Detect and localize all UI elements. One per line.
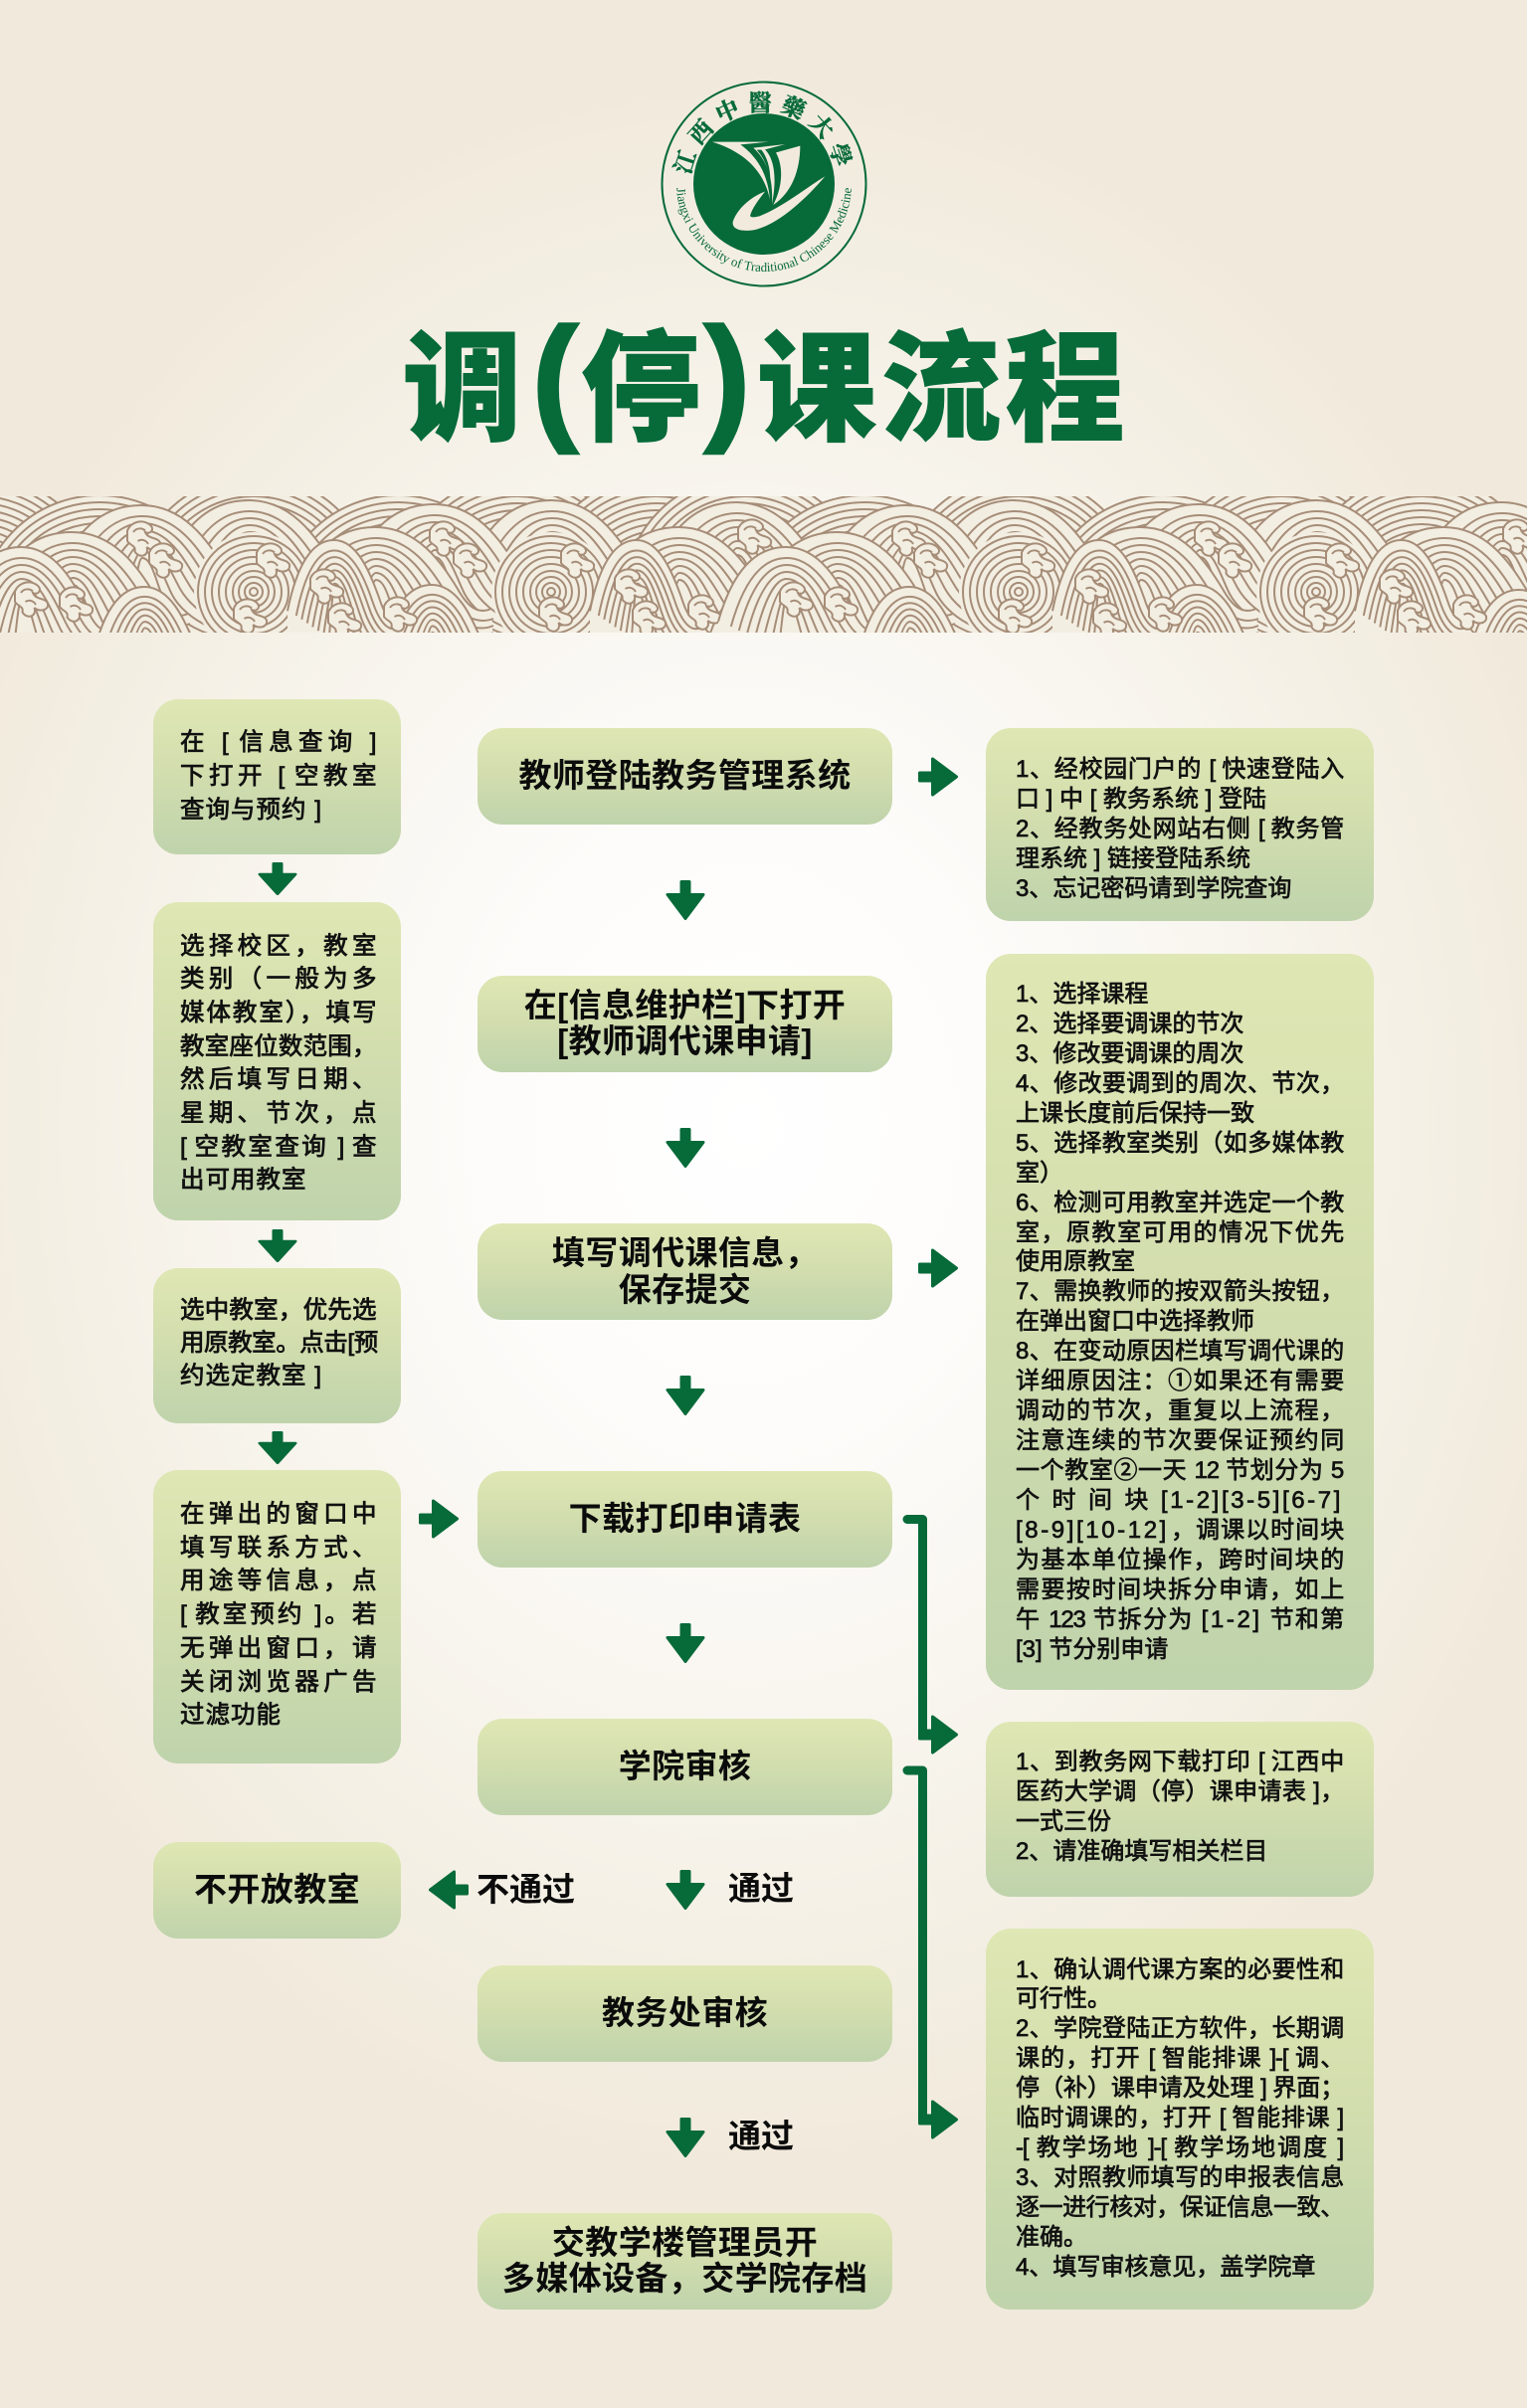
right box 4: college review notes: 2、学院登陆正方软件，长期调 [1016, 2015, 1343, 2042]
step 3: 填写调代课信息， [552, 1233, 818, 1271]
step 5 [477, 1719, 892, 1815]
right box 1: login notes [986, 728, 1374, 921]
label: passed 2: 通过 [728, 2118, 794, 2154]
arrow: step 1 to 2 [668, 881, 703, 919]
arrow: step 1 to right box 1 [919, 759, 957, 795]
left box 2: 选择校区，教室 [180, 933, 375, 959]
right box 2: application notes: 6、检测可用教室并选定一个教 [1016, 1190, 1343, 1216]
right box 2: application notes: [8-9][10-12]，调课以时间块 [1016, 1517, 1343, 1544]
title: ( [532, 298, 578, 455]
left box 4: [ 教室预约 ]。若 [180, 1601, 375, 1628]
right box 3: print form notes [986, 1722, 1374, 1897]
logo inner disc [693, 113, 835, 255]
label: passed 1: 通过 [728, 1870, 794, 1907]
right box 2: application notes: [3] 节分别申请 [1016, 1636, 1168, 1663]
right box 2: application notes: 5、选择教室类别（如多媒体教 [1016, 1130, 1343, 1157]
title: 流 [881, 292, 1001, 465]
right box 1: login notes: 口 ] 中 [ 教务系统 ] 登陆 [1016, 786, 1266, 813]
left box 4: 用途等信息，点 [180, 1568, 375, 1594]
step 7 [477, 2213, 892, 2310]
right box 2: application notes [986, 954, 1374, 1690]
step 4: 下载打印申请表 [569, 1500, 801, 1536]
left box 3: 用原教室。点击[预 [180, 1330, 375, 1357]
arrow: step 3 to right box 2 [919, 1250, 957, 1286]
arrow: not passed to left [430, 1872, 468, 1908]
left box 2: 类别（一般为多 [180, 966, 375, 993]
left box 5: classroom not opened [153, 1842, 401, 1939]
left box 3 [153, 1268, 401, 1423]
right box 4: college review notes: 1、确认调代课方案的必要性和 [1016, 1955, 1343, 1983]
connector: step 4 to right box 3 [907, 1520, 957, 1753]
arrow: left box 4 to step 4 [420, 1501, 458, 1537]
right box 3: print form notes: 一式三份 [1016, 1808, 1111, 1835]
arrow: left column down 2 [260, 1230, 295, 1261]
right box 2: application notes: 详细原因注：①如果还有需要 [1016, 1368, 1343, 1394]
title: ) [704, 298, 750, 455]
step 2: 在[信息维护栏]下打开 [524, 987, 846, 1022]
step 3: 保存提交 [619, 1271, 751, 1307]
right box 2: application notes: 需要按时间块拆分申请，如上 [1016, 1576, 1343, 1603]
left box 2: 然后填写日期、 [180, 1066, 375, 1093]
left box 2: 媒体教室），填写 [180, 1000, 375, 1026]
title: 程 [1005, 292, 1124, 465]
right box 3: print form notes: 1、到教务网下载打印 [ 江西中 [1016, 1749, 1343, 1775]
step 6 [477, 1965, 892, 2062]
arrow: step 3 to 4 [668, 1377, 703, 1414]
label: not passed: 不通过 [477, 1871, 575, 1908]
right box 4: college review notes: 4、填写审核意见，盖学院章 [1016, 2254, 1315, 2281]
step 4 [477, 1471, 892, 1568]
left box 4: 填写联系方式、 [180, 1535, 375, 1562]
step 1 [477, 728, 892, 825]
right box 2: application notes: 午 123 节拆分为 [1-2] 节和第 [1016, 1606, 1343, 1633]
left box 4: 关闭浏览器广告 [180, 1669, 375, 1696]
right box 1: login notes: 1、经校园门户的 [ 快速登陆入 [1016, 756, 1343, 783]
right box 2: application notes: 3、修改要调课的周次 [1016, 1040, 1243, 1067]
right box 1: login notes: 理系统 ] 链接登陆系统 [1016, 845, 1250, 872]
right box 2: application notes: 一个教室②一天 12 节划分为 5 [1016, 1457, 1343, 1484]
arrow: step 6 to 7 [668, 2119, 703, 2156]
right box 2: application notes: 8、在变动原因栏填写调代课的 [1016, 1338, 1343, 1365]
step 3 [477, 1223, 892, 1320]
right box 2: application notes: 4、修改要调到的周次、节次， [1016, 1070, 1343, 1097]
left box 1: 下打开 [ 空教室 [180, 762, 375, 790]
right box 2: application notes: 注意连续的节次要保证预约同 [1016, 1427, 1343, 1454]
right box 2: application notes: 室） [1016, 1160, 1063, 1187]
arrow: left column down 1 [260, 863, 295, 894]
left box 1: 查询与预约 ] [180, 796, 322, 824]
step 7: 交教学楼管理员开 [552, 2224, 818, 2260]
title: 调 [402, 292, 521, 465]
arrow: step 4 to 5 [668, 1625, 703, 1661]
logo English name: Jiangxi University of Traditional Chinese Medicine [676, 188, 852, 273]
right box 2: application notes: 调动的节次，重复以上流程， [1016, 1397, 1343, 1424]
left box 2: 教室座位数范围， [180, 1033, 375, 1060]
left box 4: 无弹出窗口，请 [180, 1635, 375, 1662]
right box 2: application notes: 7、需换教师的按双箭头按钮， [1016, 1278, 1343, 1305]
connector: step 5 to right box 4 [907, 1770, 957, 2137]
right box 4: college review notes: 课的，打开 [ 智能排课 ]-[ 调、 [1016, 2045, 1343, 2072]
title [402, 292, 1124, 465]
right box 4: college review notes: 准确。 [1016, 2224, 1087, 2251]
logo: Jiangxi University of Traditional Chinese Medicine [661, 82, 867, 286]
right box 3: print form notes: 2、请准确填写相关栏目 [1016, 1838, 1267, 1865]
left box 2: [ 空教室查询 ] 查 [180, 1134, 375, 1161]
left box 2 [153, 902, 401, 1220]
right box 1: login notes: 2、经教务处网站右侧 [ 教务管 [1016, 816, 1343, 842]
right box 4: college review notes: 可行性。 [1016, 1985, 1111, 2012]
step 2: [教师调代课申请] [557, 1022, 813, 1058]
arrow: step 2 to 3 [668, 1130, 703, 1166]
logo Chinese name: 江西中醫藥大學 [671, 91, 854, 173]
step 7: 多媒体设备，交学院存档 [502, 2260, 867, 2296]
left box 3: 选中教室，优先选 [180, 1297, 375, 1324]
arrow: left column down 3 [260, 1432, 295, 1463]
right box 4: college review notes: 停（补）课申请及处理 ] 界面； [1016, 2075, 1343, 2102]
right box 1: login notes: 3、忘记密码请到学院查询 [1016, 875, 1291, 902]
step 6: 教务处审核 [602, 1993, 768, 2031]
left box 1: 在 [ 信息查询 ] [180, 728, 375, 756]
right box 2: application notes: 1、选择课程 [1016, 981, 1148, 1008]
logo ship emblem [712, 142, 825, 231]
left box 2: 星期、节次，点 [180, 1100, 375, 1127]
right box 2: application notes: 2、选择要调课的节次 [1016, 1011, 1243, 1037]
logo outer ring [663, 82, 865, 286]
right box 2: application notes: 上课长度前后保持一致 [1016, 1100, 1254, 1127]
decorative wave band [0, 496, 1527, 633]
left box 4 [153, 1470, 401, 1763]
left box 2: 出可用教室 [180, 1167, 306, 1194]
right box 3: print form notes: 医药大学调（停）课申请表 ]， [1016, 1778, 1343, 1805]
right box 4: college review notes [986, 1929, 1374, 2310]
right box 2: application notes: 使用原教室 [1016, 1248, 1135, 1275]
left box 4: 过滤功能 [180, 1702, 282, 1729]
right box 2: application notes: 个 时 间 块 [1-2][3-5][6-7] [1016, 1487, 1343, 1514]
title: 课 [757, 292, 876, 465]
left box 1 [153, 699, 401, 854]
right box 4: college review notes: 逐一进行核对，保证信息一致、 [1016, 2194, 1343, 2221]
title: 停 [581, 292, 700, 465]
right box 4: college review notes: 临时调课的，打开 [ 智能排课 ] [1016, 2105, 1343, 2131]
left box 4: 在弹出的窗口中 [180, 1501, 375, 1528]
right box 2: application notes: 室，原教室可用的情况下优先 [1016, 1219, 1343, 1245]
arrow: step 5 to 6 [668, 1872, 703, 1908]
step 1: 教师登陆教务管理系统 [519, 756, 852, 794]
right box 2: application notes: 在弹出窗口中选择教师 [1016, 1308, 1254, 1335]
right box 4: college review notes: 3、对照教师填写的申报表信息 [1016, 2164, 1343, 2191]
left box 3: 约选定教室 ] [180, 1363, 322, 1389]
step 5: 学院审核 [619, 1747, 751, 1784]
right box 2: application notes: 为基本单位操作，跨时间块的 [1016, 1547, 1343, 1574]
step 2 [477, 976, 892, 1072]
left box 5: classroom not opened: 不开放教室 [194, 1870, 360, 1908]
right box 4: college review notes: -[ 教学场地 ]-[ 教学场地调度 ] [1016, 2134, 1343, 2161]
